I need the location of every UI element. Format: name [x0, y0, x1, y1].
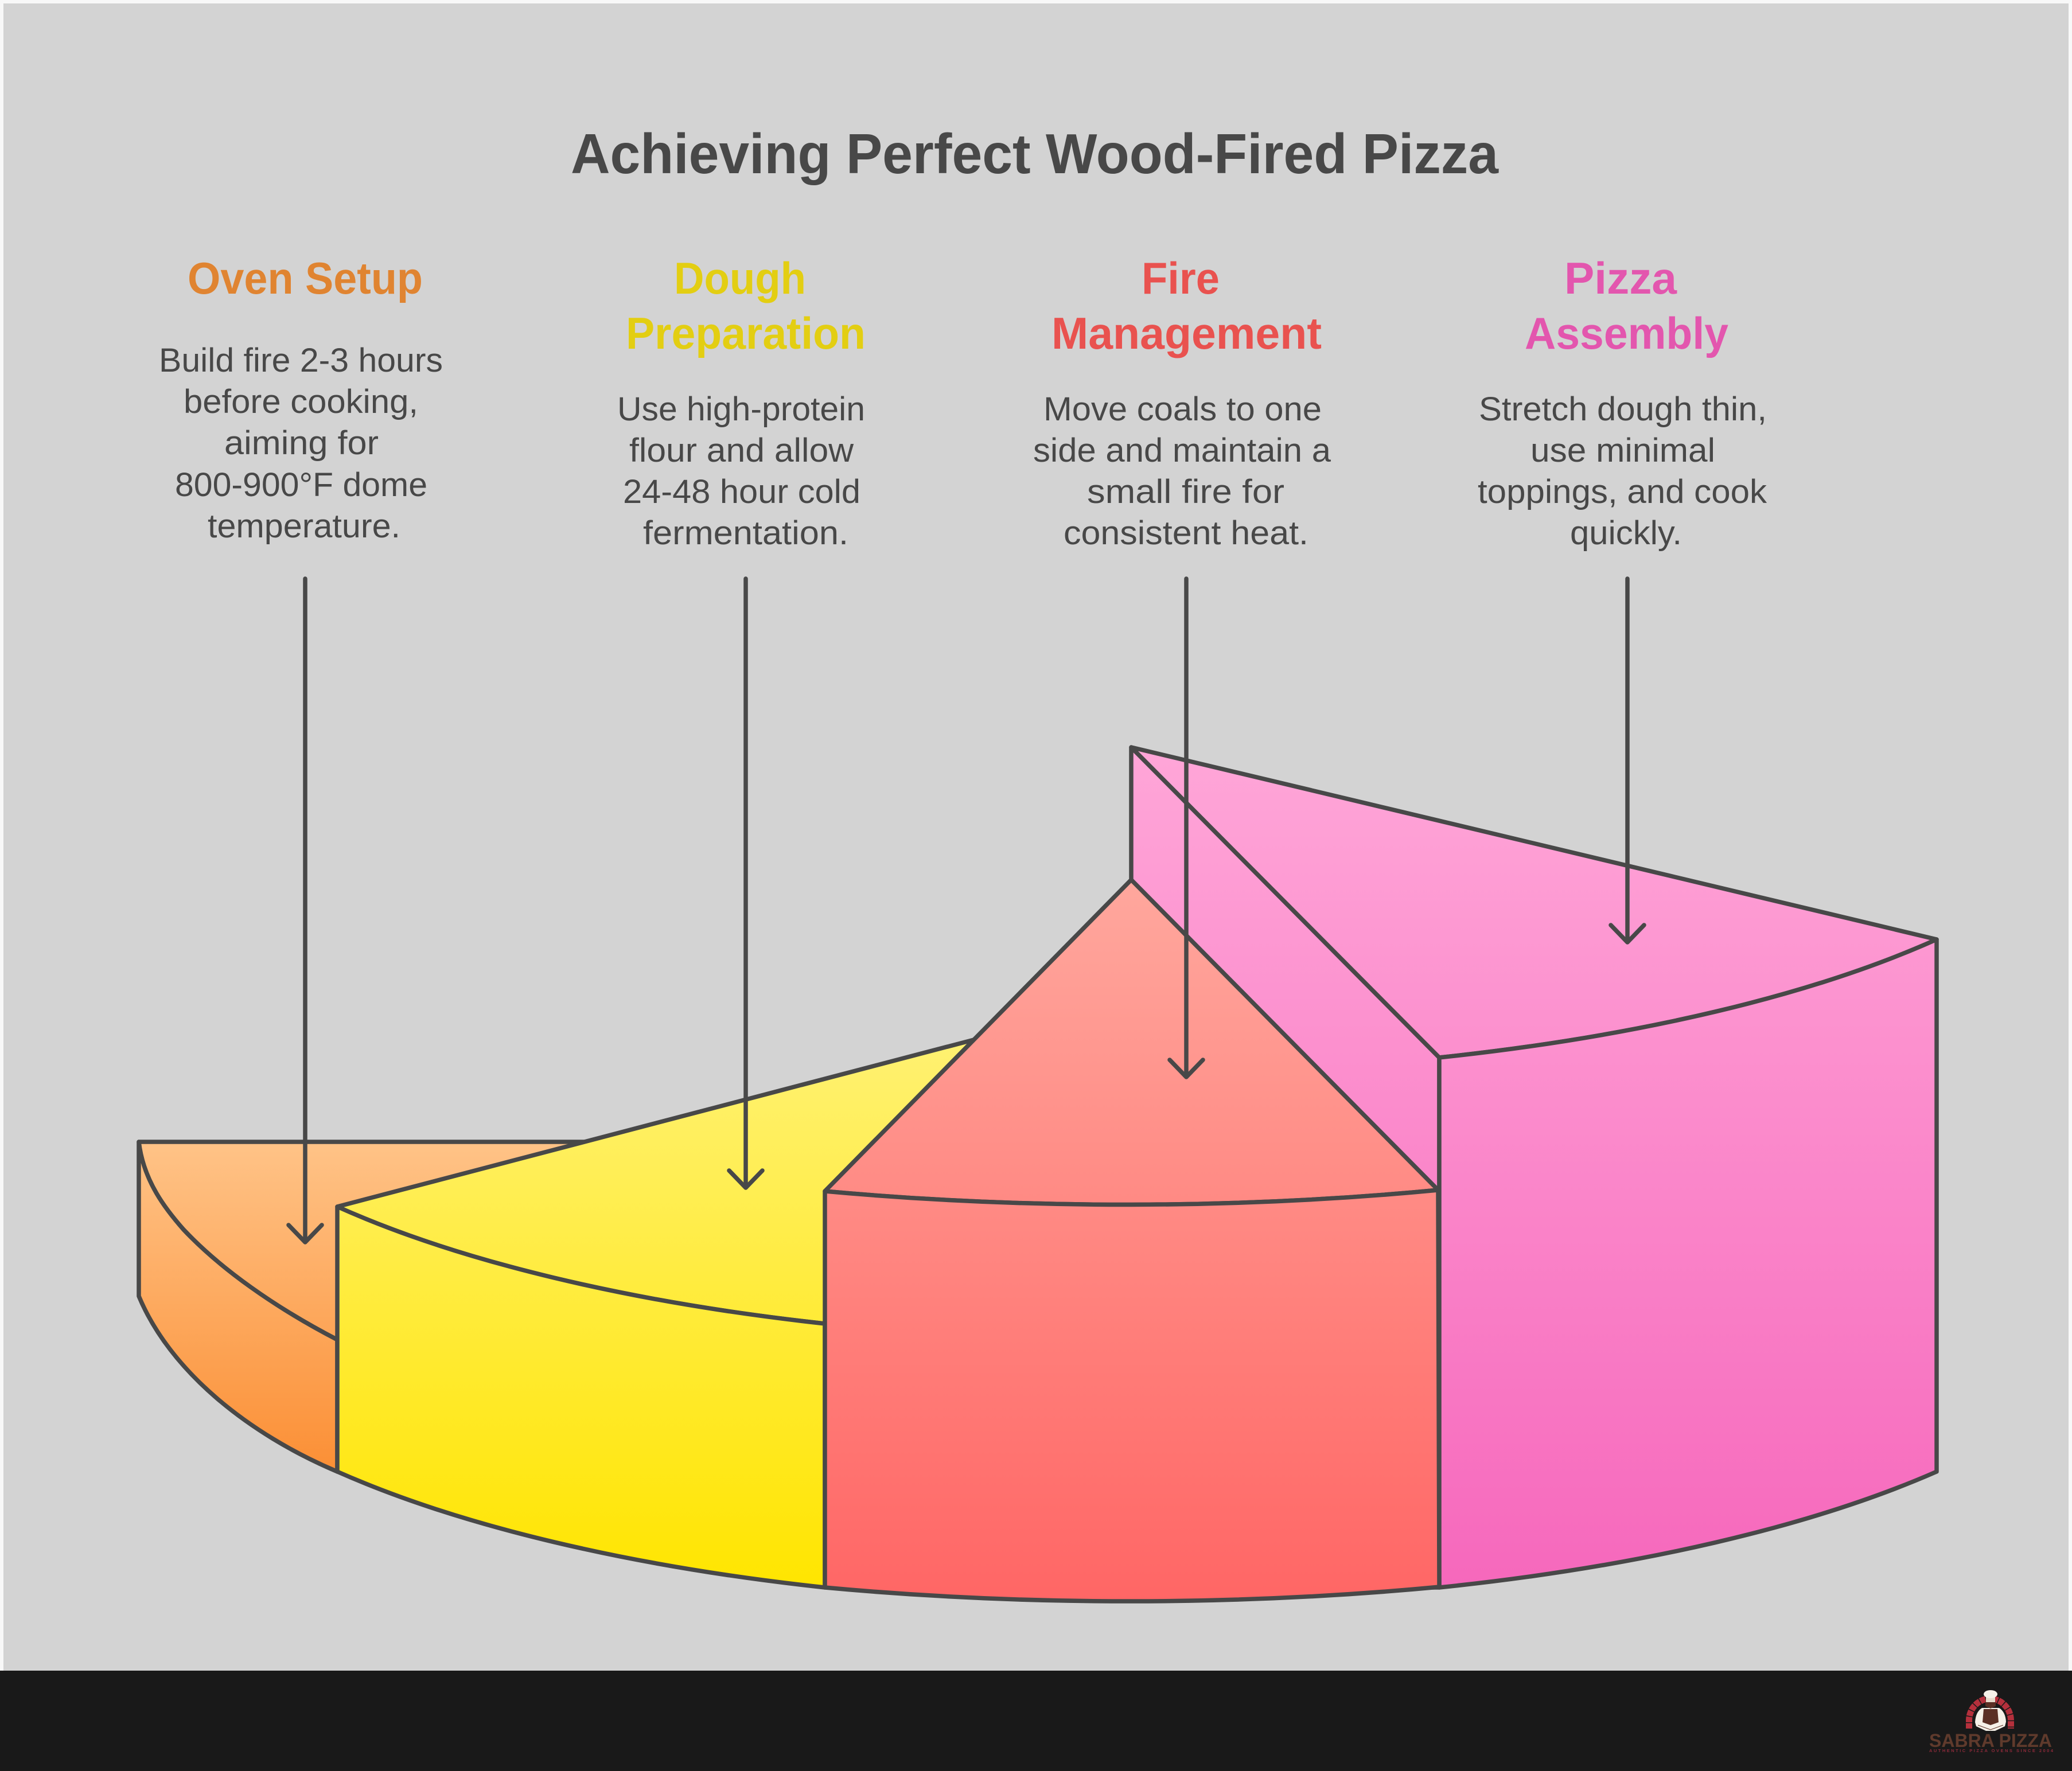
slice: dough preparation (yellow): [337, 998, 1131, 1587]
heading: pizza assembly: Pizza: [1564, 253, 1677, 303]
heading: dough preparation: [626, 253, 866, 358]
text: dough preparation description: fermentation.: [643, 514, 848, 552]
heading: fire management: [1051, 253, 1322, 358]
logo: Sabra Pizza: [1929, 1690, 2054, 1753]
heading: dough preparation: Preparation: [626, 308, 866, 358]
text: pizza assembly description: [1478, 391, 1767, 552]
slice: pizza assembly (pink): [1131, 747, 1937, 1587]
text: oven setup description: before cooking,: [184, 383, 418, 420]
logo: Sabra Pizza: SABRA PIZZA: [1929, 1730, 2052, 1751]
text: pizza assembly description: quickly.: [1570, 514, 1682, 552]
footer bar: [0, 1671, 2072, 1771]
text: oven setup description: temperature.: [208, 508, 400, 545]
text: pizza assembly description: Stretch dough thin,: [1479, 391, 1767, 428]
text: dough preparation description: [617, 391, 865, 552]
text: fire management description: side and maintain a: [1033, 432, 1331, 469]
arrow: oven setup: [289, 579, 322, 1242]
slice: fire management (red): [825, 880, 1439, 1601]
heading: fire management: Management: [1051, 308, 1322, 358]
heading: dough preparation: Dough: [674, 253, 806, 303]
heading: oven setup: Oven Setup: [188, 253, 423, 303]
heading: fire management: Fire: [1142, 253, 1220, 303]
text: oven setup description: 800-900°F dome: [175, 466, 427, 504]
text: fire management description: consistent heat.: [1064, 514, 1308, 552]
arrow: fire management: [1170, 579, 1203, 1077]
arrow: dough preparation: [729, 579, 762, 1188]
logo: Sabra Pizza: AUTHENTIC PIZZA OVENS SINCE 2004: [1929, 1748, 2054, 1753]
heading: pizza assembly: [1525, 253, 1728, 358]
text: oven setup description: [159, 342, 443, 545]
text: fire management description: [1033, 391, 1331, 552]
heading: pizza assembly: Assembly: [1525, 308, 1728, 358]
text: fire management description: small fire for: [1087, 473, 1284, 510]
text: dough preparation description: flour and allow: [629, 432, 854, 469]
arrow: pizza assembly: [1611, 579, 1644, 942]
slice: oven setup (orange): [139, 1142, 631, 1472]
title: Achieving Perfect Wood-Fired Pizza: [571, 122, 1499, 185]
text: pizza assembly description: use minimal: [1530, 432, 1715, 469]
text: fire management description: Move coals to one: [1043, 391, 1322, 428]
text: oven setup description: aiming for: [224, 424, 379, 462]
text: pizza assembly description: toppings, and cook: [1478, 473, 1767, 510]
text: dough preparation description: Use high-protein: [617, 391, 865, 428]
text: dough preparation description: 24-48 hour cold: [623, 473, 860, 510]
text: oven setup description: Build fire 2-3 hours: [159, 342, 443, 379]
